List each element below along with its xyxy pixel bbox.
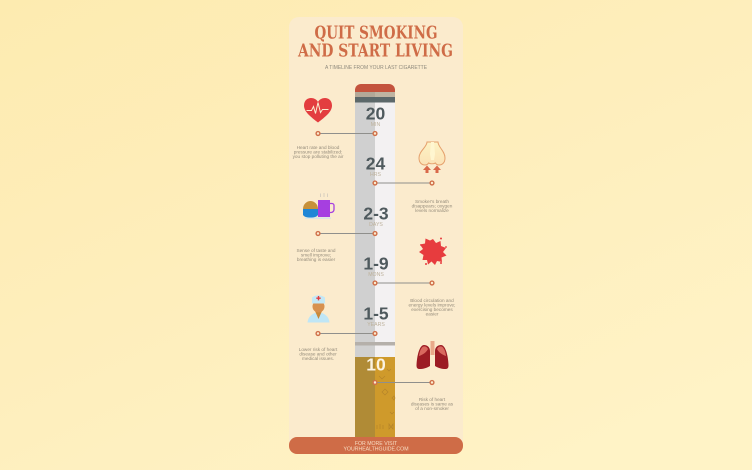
step: 1-5 years: YEARS [367, 322, 385, 328]
connector: 2-3 days [316, 232, 377, 235]
text: 1-5 years: medical issues. [302, 356, 334, 361]
text: 1-9 mons: exercising becomes [411, 307, 453, 312]
title: AND START LIVING [297, 42, 453, 62]
text: 24 hrs: levels normalize [415, 208, 449, 213]
text: 24 hrs [412, 199, 453, 213]
cigarette burning tip [355, 84, 395, 92]
icon: nose [419, 142, 445, 173]
text: 2-3 days: breathing is easier [297, 257, 336, 262]
text: 1-5 years [299, 347, 338, 361]
step: 20 min: MIN [371, 122, 381, 128]
text: 24 hrs: disappears; oxygen [412, 204, 453, 208]
step: 2-3 days: DAYS [369, 222, 383, 228]
step: 24 hrs: 24 [366, 154, 385, 174]
icon: red splat [419, 238, 447, 265]
icon: heart [304, 98, 332, 122]
text: 10 years [411, 397, 454, 411]
step: 1-5 years: 1-5 [363, 304, 389, 324]
text: 2-3 days: smell improve; [301, 252, 331, 258]
text: 1-9 mons: easier [426, 312, 439, 316]
text: 20 min: pressure are stabilized: [294, 150, 342, 154]
text: 20 min [293, 145, 344, 159]
icon: bowl and cup [303, 193, 334, 219]
footer banner: YOURHEALTHGUIDE.COM [343, 446, 409, 452]
step: 10 years: 10 [366, 354, 386, 374]
cigarette [355, 84, 395, 438]
connector: 24 hrs [373, 181, 434, 185]
text: 1-9 mons [409, 298, 455, 316]
step: 1-9 mons: MONS [368, 272, 384, 278]
step: 24 hrs: HRS [370, 172, 382, 178]
connector: 20 min [316, 132, 377, 135]
icon: doctor [308, 295, 330, 322]
footer banner [289, 437, 463, 454]
text: 10 years: of a non-smoker [415, 406, 449, 411]
title [297, 24, 453, 62]
text: 20 min: you stop polluting the air [293, 154, 344, 159]
text: 1-9 mons: energy levels improve; [409, 302, 455, 308]
text: 2-3 days: Sense of taste and [296, 248, 336, 253]
icon: lungs [416, 341, 449, 369]
text: 2-3 days [296, 248, 336, 262]
step: 2-3 days: 2-3 [363, 204, 389, 224]
step: 1-9 mons: 1-9 [363, 254, 389, 274]
panel: timeline card [289, 17, 463, 453]
text: 1-9 mons: Blood circulation and [410, 298, 454, 303]
subtitle: A TIMELINE FROM YOUR LAST CIGARETTE [325, 65, 428, 71]
text: 24 hrs: Smoker's breath [415, 199, 449, 204]
text: 1-5 years: Lower risk of heart [299, 347, 338, 352]
title: QUIT SMOKING [314, 24, 438, 44]
connector: 1-5 years [316, 332, 377, 335]
connector: 1-9 mons [373, 281, 434, 285]
cigarette filter [355, 357, 395, 438]
text: 1-5 years: disease and other [299, 352, 337, 356]
text: 10 years: diseases is same as [411, 402, 454, 406]
cigarette paper body [355, 102, 395, 358]
step: 20 min: 20 [366, 104, 385, 124]
connector: 10 years [373, 381, 434, 384]
footer banner: FOR MORE VISIT [355, 441, 398, 447]
text: 10 years: Risk of heart [419, 397, 446, 402]
text: 20 min: Heart rate and blood [297, 145, 340, 150]
